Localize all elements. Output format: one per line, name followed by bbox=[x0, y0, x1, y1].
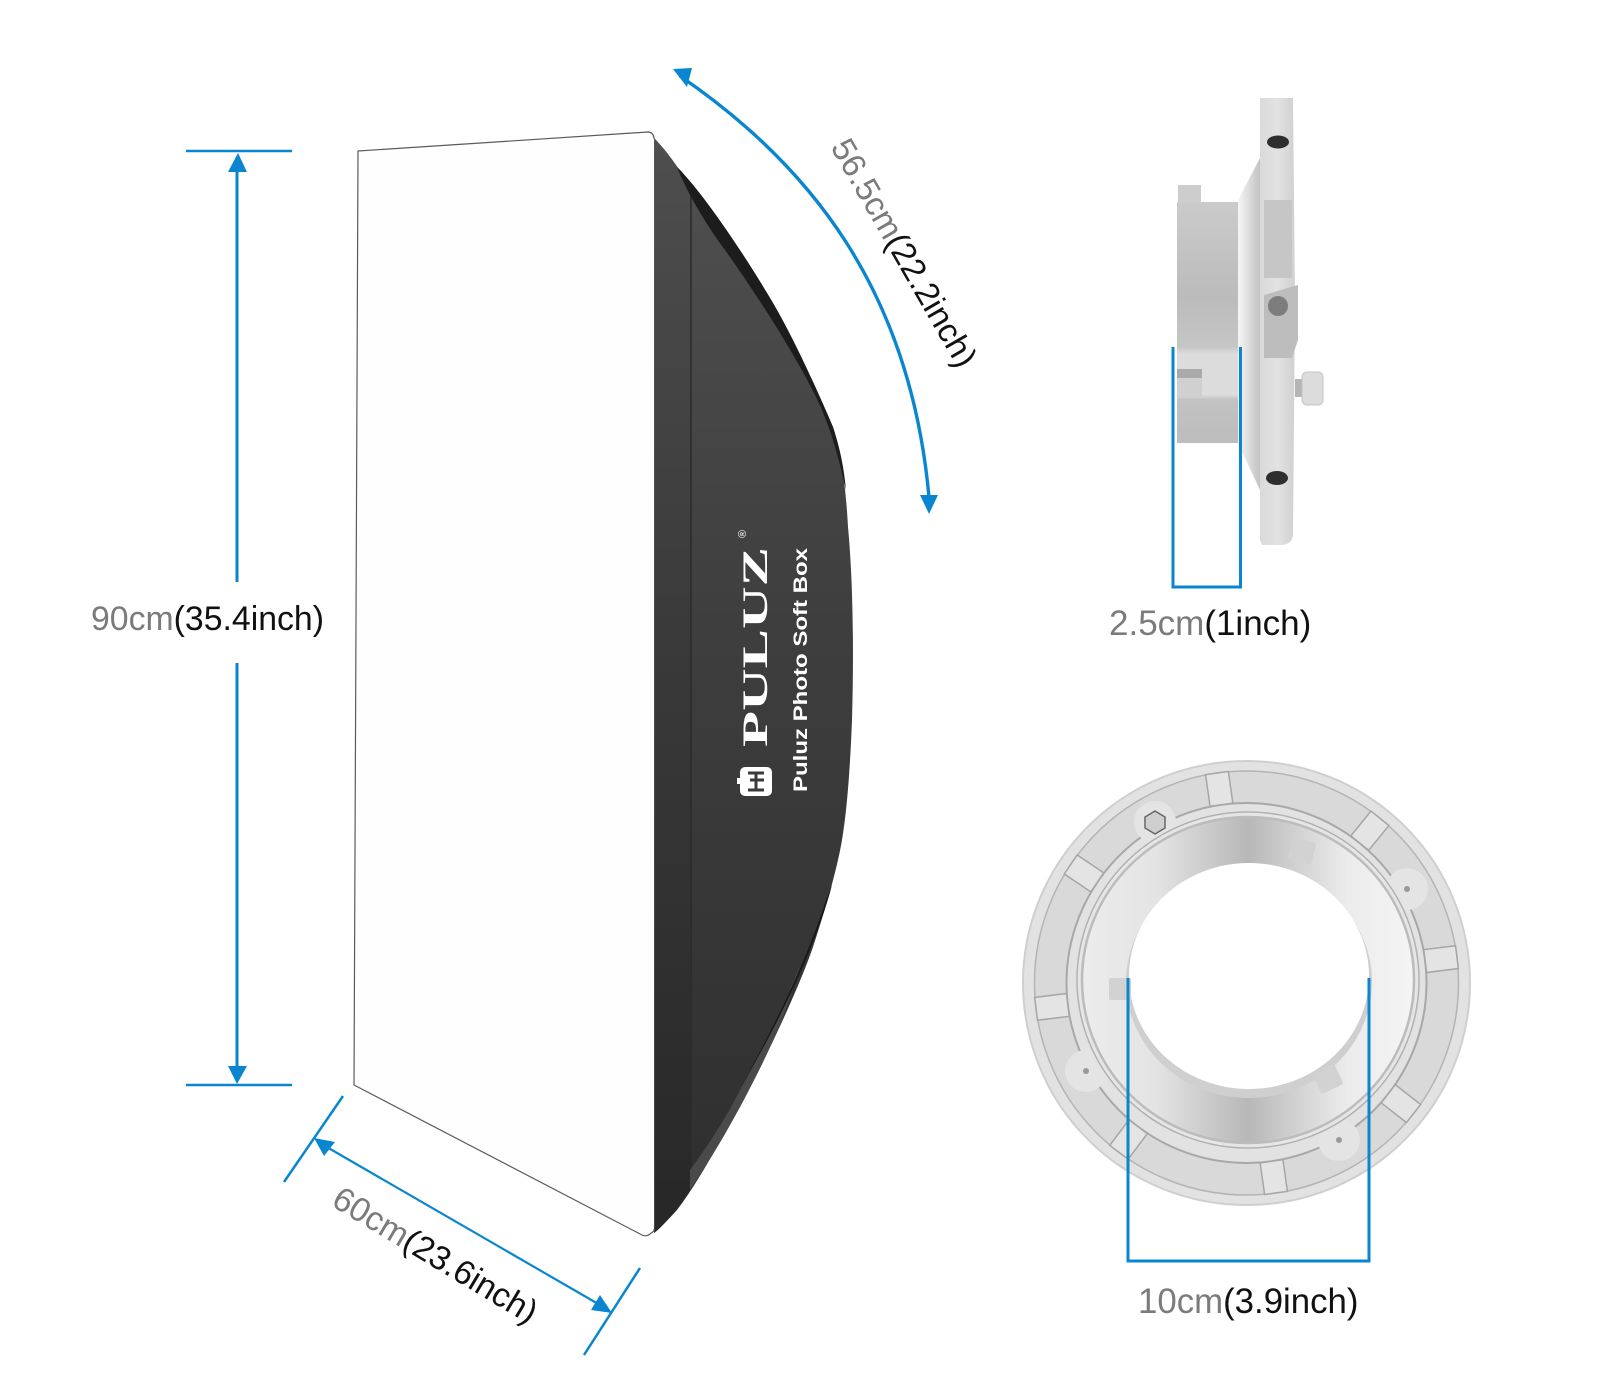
depth bracket label: 2.5cm(1inch) bbox=[1109, 604, 1311, 643]
upper fold shadow bbox=[677, 167, 846, 490]
face right edge cover bbox=[648, 139, 654, 1229]
cylinder bbox=[1177, 202, 1238, 443]
hex bolt bbox=[1145, 811, 1165, 834]
recessed panels bbox=[1050, 787, 1442, 1179]
band seam bbox=[690, 190, 692, 1175]
diameter bracket label: 10cm(3.9inch) bbox=[1138, 1282, 1358, 1321]
diameter bracket bbox=[1128, 978, 1369, 1261]
depth label: 56.5cm(22.2inch) bbox=[823, 132, 984, 374]
softbox white diffuser face bbox=[354, 132, 654, 1236]
screw bosses bbox=[1065, 801, 1428, 1161]
bolt head bbox=[1268, 296, 1288, 316]
inner band bbox=[1082, 817, 1414, 1143]
square tabs bbox=[1109, 837, 1344, 1094]
depth bracket bbox=[1173, 347, 1240, 587]
center opening bbox=[1129, 863, 1369, 1089]
height dimension: 90cm bbox=[91, 151, 324, 1085]
inner groove bbox=[1077, 812, 1419, 1148]
cone bbox=[1238, 158, 1260, 490]
width dimension: 60cm bbox=[284, 1096, 640, 1355]
depth dimension: 56.5cm bbox=[673, 68, 984, 514]
registered mark: ® bbox=[737, 530, 749, 538]
thumb screw bbox=[1295, 379, 1303, 397]
bracket bbox=[1264, 285, 1298, 358]
brand logo text: PULUZ bbox=[735, 547, 775, 747]
brand logo icon bbox=[737, 767, 772, 796]
width label: 60cm(23.6inch) bbox=[326, 1179, 544, 1331]
lower fold shadow bbox=[740, 885, 832, 1088]
softbox side panel bbox=[654, 138, 853, 1233]
tab mid bbox=[1177, 369, 1202, 398]
lower fold highlight bbox=[690, 965, 800, 1190]
tab top bbox=[1178, 185, 1201, 203]
ribs bbox=[1035, 771, 1458, 1195]
height label: 90cm(35.4inch) bbox=[91, 600, 324, 638]
softbox bbox=[354, 132, 853, 1236]
speedring side view bbox=[1109, 98, 1323, 643]
screws bbox=[1083, 886, 1410, 1143]
speedring front view bbox=[1023, 761, 1470, 1321]
outer disc bbox=[1023, 761, 1470, 1205]
plate shaded patch bbox=[1264, 200, 1292, 278]
softbox front band bbox=[654, 138, 691, 1233]
product name: Puluz Photo Soft Box bbox=[790, 548, 812, 792]
flange plate bbox=[1260, 98, 1295, 545]
mounting hole top bbox=[1267, 136, 1289, 148]
inner lip bbox=[1126, 866, 1372, 1098]
mounting hole bottom bbox=[1266, 471, 1288, 485]
